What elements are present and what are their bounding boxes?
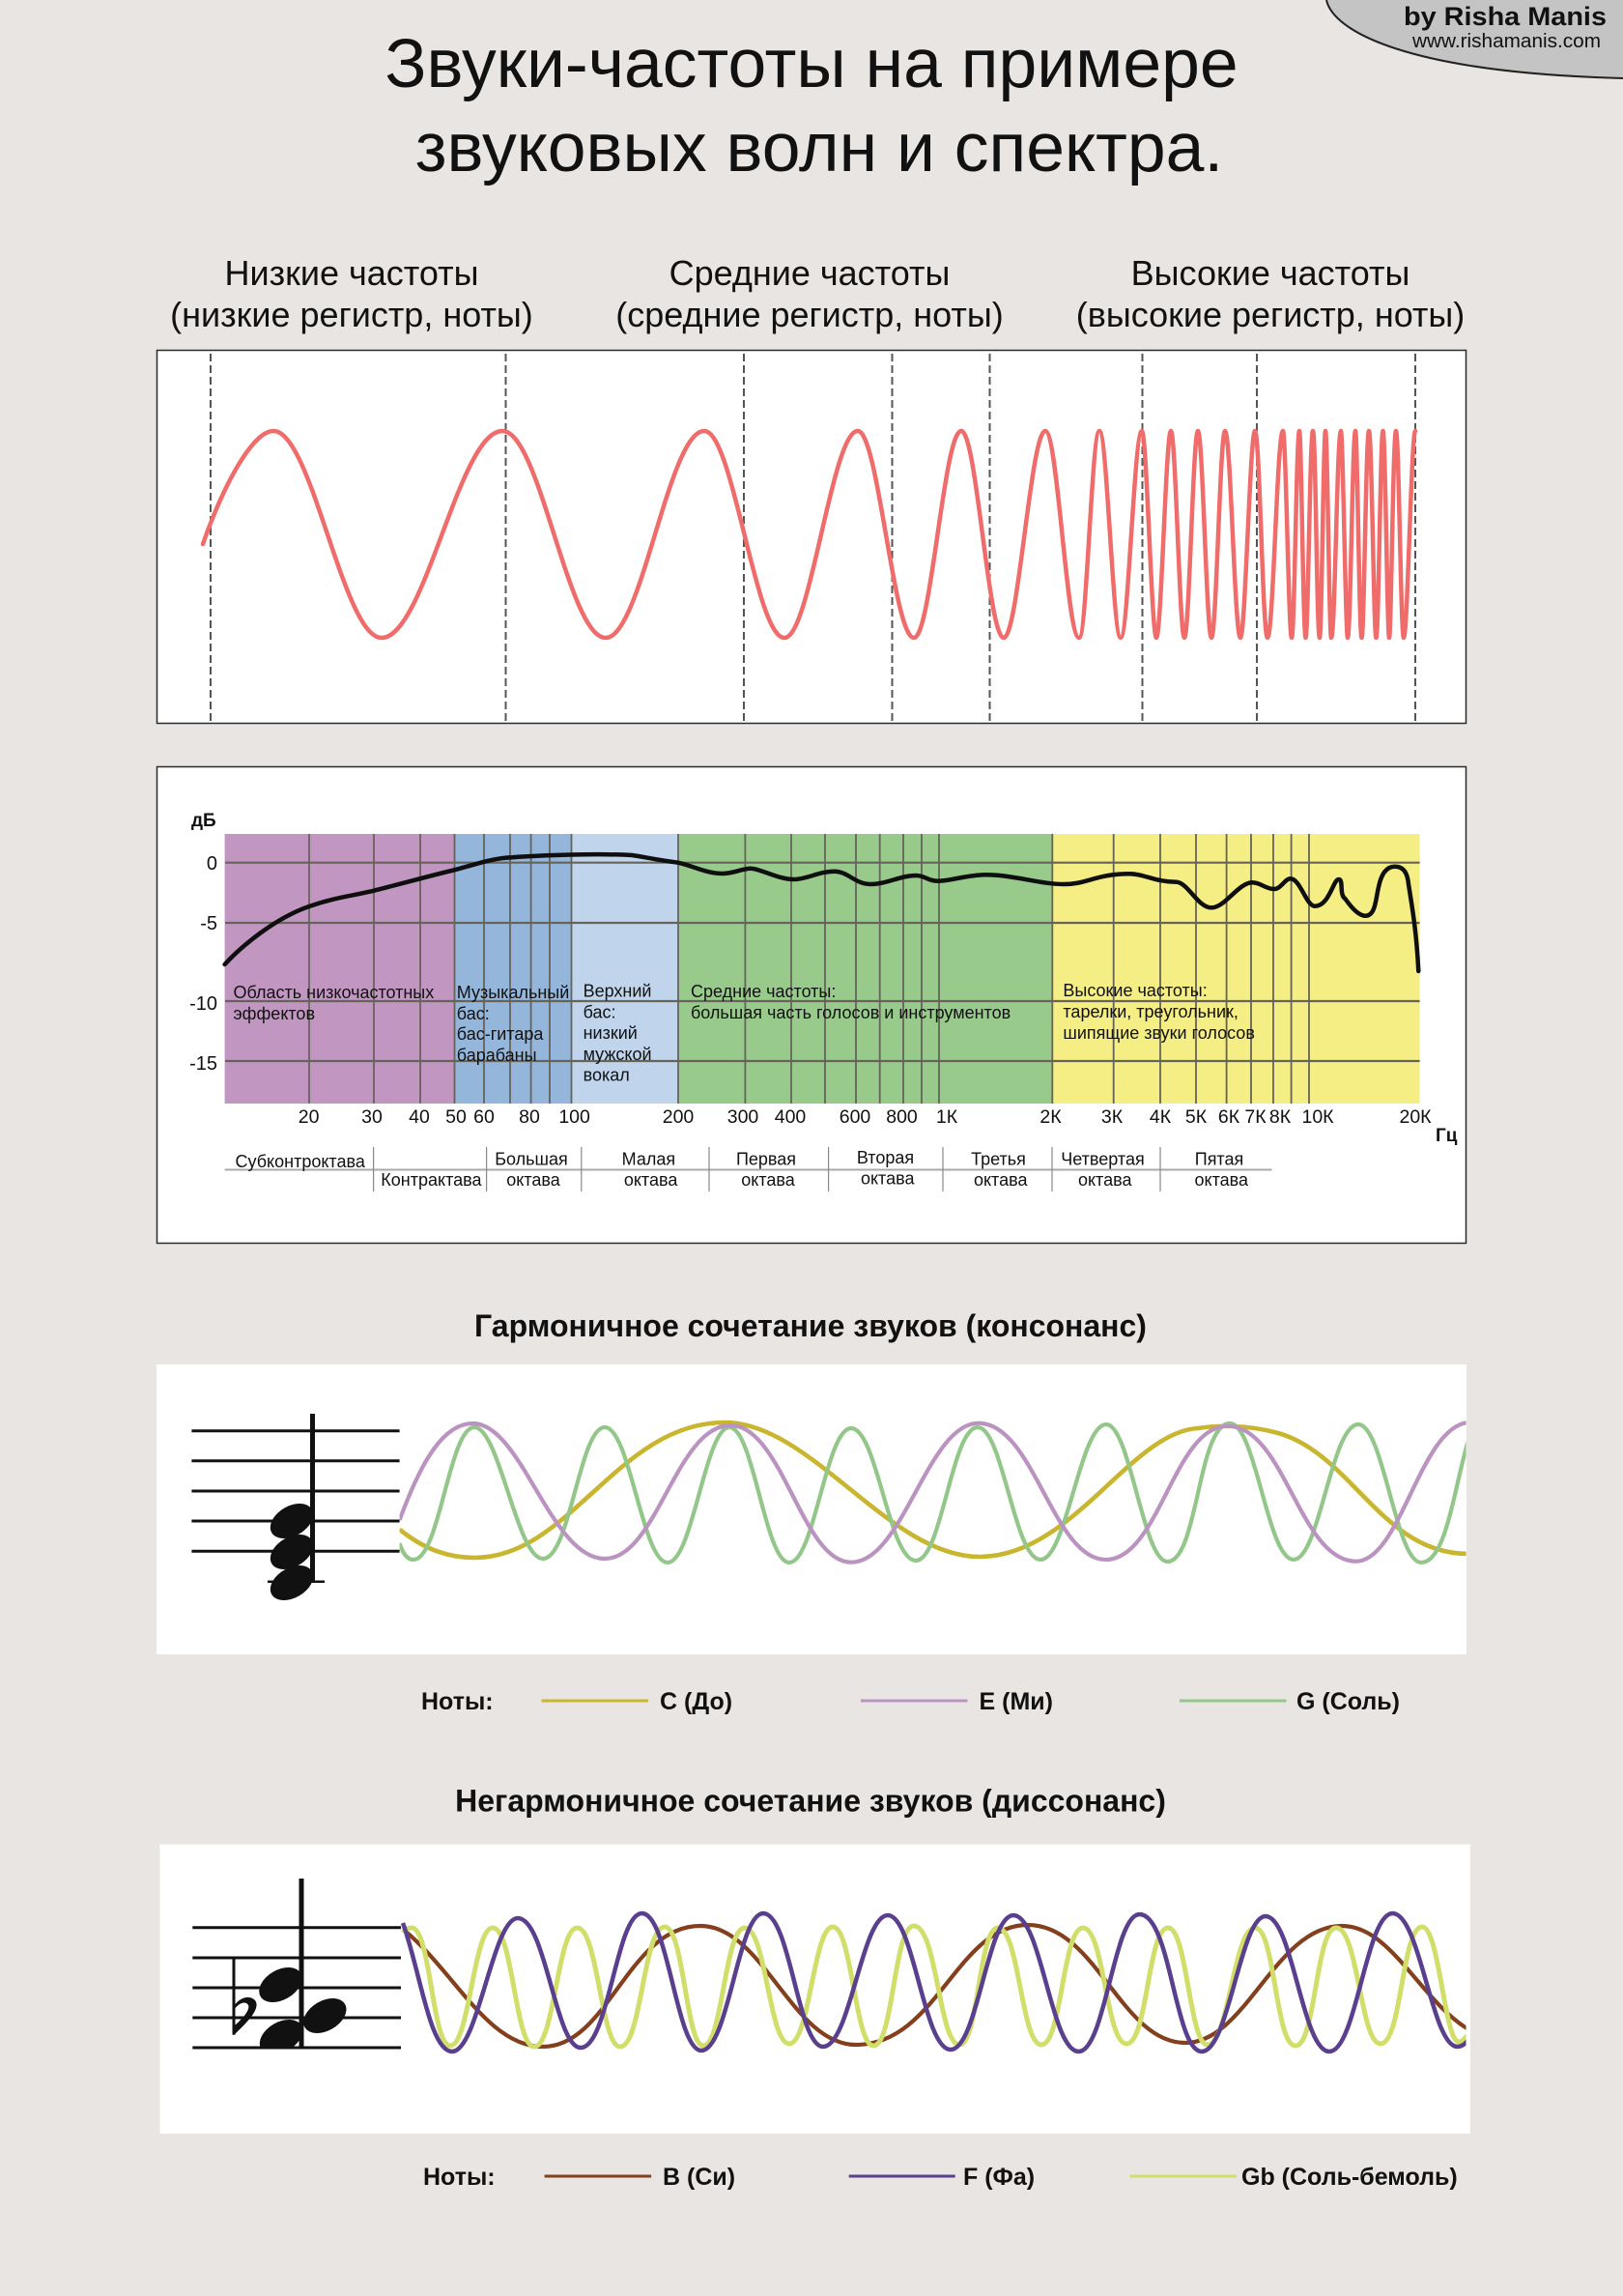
zone descriptions: бас:: [457, 1004, 490, 1023]
octave table: Вторая: [857, 1148, 914, 1167]
octave table: Большая: [495, 1150, 568, 1169]
legend: dissonance notes: Gb (Соль-бемоль): [1241, 2164, 1458, 2191]
octave table: октава: [1078, 1170, 1132, 1190]
panel: consonance: [157, 1364, 1468, 1654]
octave table: Субконтроктава: [236, 1152, 366, 1171]
x axis labels: 400: [775, 1106, 806, 1128]
title: Звуки-частоты на примере: [384, 25, 1239, 102]
zone descriptions: вокал: [584, 1065, 630, 1084]
x axis labels: 80: [519, 1106, 540, 1128]
y axis labels: 0: [207, 853, 217, 875]
panel: frequency spectrum: [157, 767, 1466, 1243]
icon: dissonant chord on staff: [192, 1879, 401, 2061]
heading: dissonance: Негармоничное сочетание звуков (диссонанс): [455, 1784, 1166, 1819]
x axis labels: 300: [727, 1106, 758, 1128]
x axis labels: 30: [361, 1106, 383, 1128]
panel: sound wave with rising frequency: [157, 350, 1466, 723]
octave table: октава: [861, 1169, 915, 1189]
zone descriptions: большая часть голосов и инструментов: [691, 1003, 1011, 1022]
frequency range headings: Низкие частоты: [225, 253, 478, 293]
x axis labels: 600: [840, 1106, 870, 1128]
octave table: октава: [624, 1170, 678, 1190]
frequency range headings: (высокие регистр, ноты): [1076, 295, 1465, 334]
octave table: Контрактава: [381, 1170, 482, 1190]
legend: consonance notes: E (Ми): [980, 1688, 1053, 1715]
legend: dissonance notes: [423, 2164, 1458, 2191]
octave table: октава: [974, 1170, 1028, 1190]
zone descriptions: тарелки, треугольник,: [1063, 1002, 1239, 1021]
x axis labels: 50: [445, 1106, 467, 1128]
zone descriptions: Высокие частоты:: [1063, 981, 1208, 1000]
zone descriptions: шипящие звуки голосов: [1063, 1023, 1255, 1043]
octave table: [225, 1147, 1272, 1191]
zone descriptions: Музыкальный: [457, 983, 569, 1002]
legend: dissonance notes: F (Фа): [963, 2164, 1035, 2191]
octave table: Малая: [622, 1150, 675, 1169]
x axis labels: 200: [663, 1106, 694, 1128]
octave table: Пятая: [1195, 1150, 1243, 1169]
wave curve: [203, 431, 1415, 638]
x axis labels: 40: [409, 1106, 430, 1128]
waves: B, F, Gb: [403, 1913, 1468, 2052]
y axis labels: -15: [189, 1053, 217, 1075]
x axis labels: 3К: [1101, 1106, 1124, 1128]
x axis labels: 60: [473, 1106, 495, 1128]
x axis labels: 5К: [1185, 1106, 1208, 1128]
zone descriptions: мужской: [584, 1045, 652, 1064]
author badge: [1326, 0, 1623, 78]
zone: musical bass: [454, 834, 572, 1104]
title: [384, 25, 1239, 187]
heading: consonance: Гармоничное сочетание звуков (консонанс): [474, 1308, 1147, 1343]
x axis labels: 100: [558, 1106, 590, 1128]
y axis labels: [189, 811, 217, 1075]
zone descriptions: [234, 981, 1255, 1084]
zone: high frequencies: [1052, 834, 1420, 1104]
frequency range headings: [170, 253, 1465, 334]
zone descriptions: Средние частоты:: [691, 982, 836, 1001]
octave table: октава: [741, 1170, 796, 1190]
frequency range headings: (низкие регистр, ноты): [170, 295, 533, 334]
author badge: by Risha Manis: [1404, 2, 1607, 31]
x axis labels: [299, 1106, 1432, 1128]
x axis labels: 8К: [1269, 1106, 1292, 1128]
y axis labels: дБ: [191, 811, 216, 831]
legend: consonance notes: C (До): [660, 1688, 732, 1715]
legend: consonance notes: [421, 1688, 1400, 1715]
octave table: Третья: [971, 1150, 1026, 1169]
octave table: Первая: [736, 1150, 796, 1169]
legend: consonance notes: Ноты:: [421, 1688, 494, 1715]
zone descriptions: эффектов: [234, 1004, 315, 1023]
icon: C major chord on staff: [191, 1414, 400, 1607]
response curve: [225, 854, 1418, 971]
y axis labels: -10: [189, 993, 217, 1015]
title: звуковых волн и спектра.: [415, 109, 1223, 187]
panel: dissonance: [159, 1845, 1470, 2134]
x axis labels: 7К: [1244, 1106, 1267, 1128]
x axis labels: 4К: [1150, 1106, 1172, 1128]
octave table: октава: [1195, 1170, 1249, 1190]
zone descriptions: бас-гитара: [457, 1024, 544, 1044]
author badge: www.rishamanis.com: [1411, 31, 1601, 52]
zone descriptions: низкий: [584, 1023, 638, 1043]
octave table: октава: [506, 1170, 561, 1190]
frequency range headings: Высокие частоты: [1131, 253, 1409, 293]
frequency range headings: (средние регистр, ноты): [615, 295, 1004, 334]
x axis labels: 2К: [1039, 1106, 1062, 1128]
legend: dissonance notes: Ноты:: [423, 2164, 496, 2191]
axis unit: Гц: [1436, 1126, 1458, 1146]
frequency range headings: Средние частоты: [669, 253, 950, 293]
x axis labels: 6К: [1218, 1106, 1240, 1128]
x axis labels: 10К: [1301, 1106, 1334, 1128]
zone descriptions: Область низкочастотных: [234, 983, 434, 1002]
legend: dissonance notes: B (Си): [663, 2164, 735, 2191]
zone: low-frequency effects: [225, 834, 455, 1104]
zone: mid frequencies: [678, 834, 1052, 1104]
legend: consonance notes: G (Соль): [1296, 1688, 1400, 1715]
waves: C, E, G: [400, 1422, 1468, 1563]
y axis labels: -5: [200, 913, 217, 934]
zone: upper bass: [572, 834, 678, 1104]
zone descriptions: бас:: [584, 1003, 616, 1022]
x axis labels: 1К: [936, 1106, 958, 1128]
x axis labels: 20К: [1399, 1106, 1432, 1128]
zone descriptions: барабаны: [457, 1046, 537, 1065]
x axis labels: 800: [886, 1106, 918, 1128]
x axis labels: 20: [299, 1106, 320, 1128]
zone descriptions: Верхний: [584, 982, 651, 1001]
octave table: Четвертая: [1061, 1150, 1145, 1169]
